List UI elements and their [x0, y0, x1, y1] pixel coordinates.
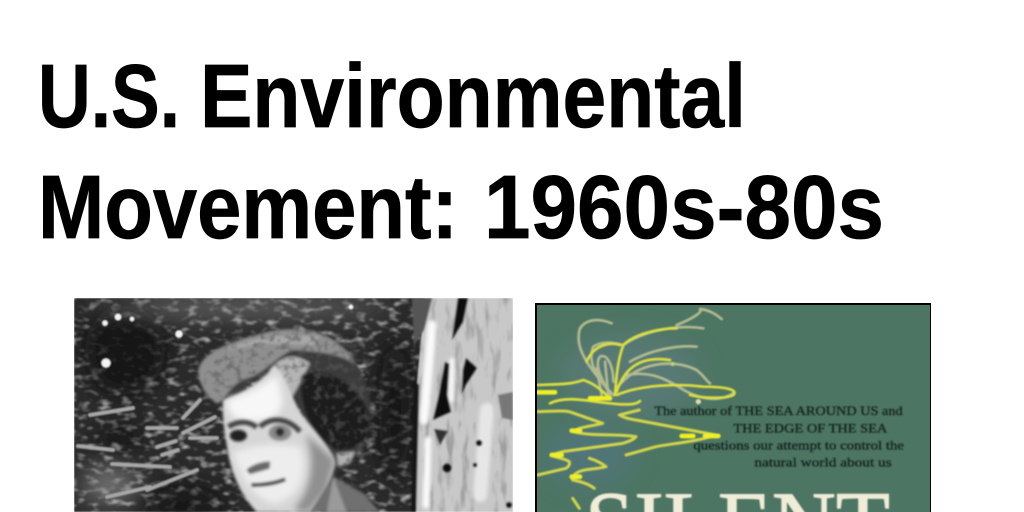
cover blurb: questions our attempt to control the — [693, 438, 904, 453]
title — [38, 47, 884, 258]
title: 1960s-80s — [484, 158, 884, 258]
cover blurb: THE EDGE OF THE SEA — [733, 421, 888, 436]
cover border — [535, 303, 931, 512]
face — [223, 365, 335, 512]
icon: yellow sea plant and waves — [537, 309, 734, 508]
title: Movement: — [38, 158, 458, 258]
title: Environmental — [200, 47, 746, 147]
collar — [310, 477, 380, 512]
hair — [198, 329, 371, 468]
photo: woman in front of tree — [74, 298, 513, 512]
book cover: Silent Spring — [535, 303, 931, 512]
title: U.S. — [38, 47, 180, 147]
cover blurb — [654, 403, 904, 469]
hair texture — [204, 330, 384, 470]
hair and face portrait — [198, 329, 371, 468]
cover blurb: natural world about us — [754, 454, 892, 469]
cover blurb: The author of THE SEA AROUND US and — [654, 403, 903, 418]
tree trunk — [411, 298, 513, 512]
cover background — [537, 305, 930, 512]
